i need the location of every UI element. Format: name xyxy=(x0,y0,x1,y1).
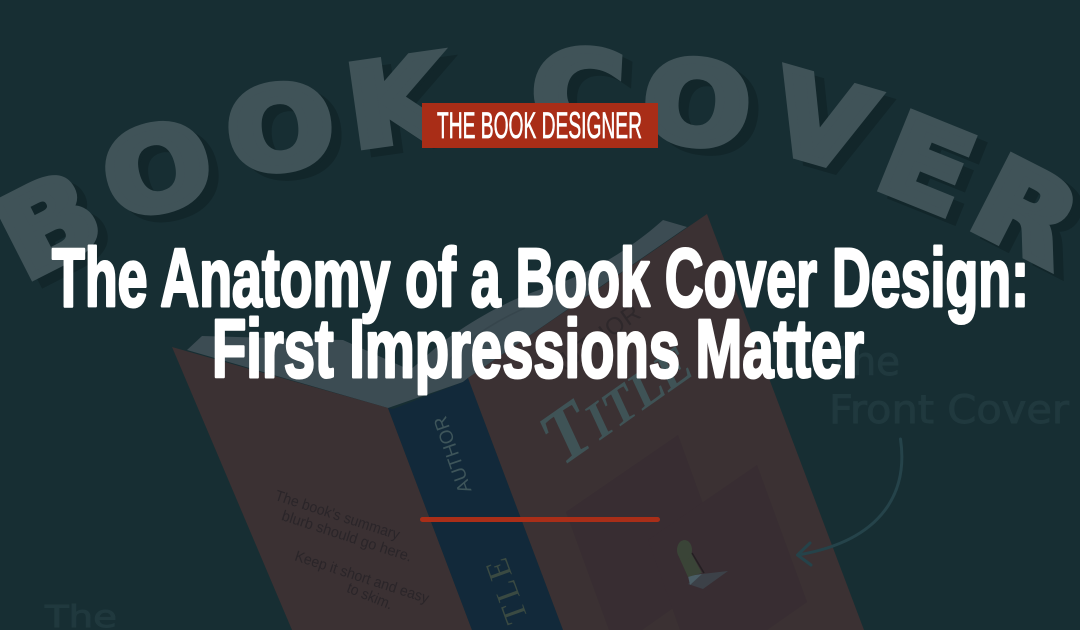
arched heading: BOOK COVER: O xyxy=(90,95,225,247)
arched heading: BOOK COVER: V xyxy=(767,54,896,206)
keyhole xyxy=(677,540,728,589)
book illustration xyxy=(172,214,864,630)
front cover inner panel xyxy=(566,435,727,630)
front cover xyxy=(468,214,864,630)
arched heading: BOOK COVER: C xyxy=(538,34,637,169)
arched heading: BOOK COVER: O xyxy=(100,102,235,254)
spine title: TLE xyxy=(478,551,536,628)
book pages xyxy=(187,220,687,408)
arched heading: BOOK COVER: O xyxy=(231,67,350,208)
arrow to front cover xyxy=(798,439,902,565)
arched heading: BOOK COVER: O xyxy=(647,42,766,183)
blurb text on back cover: blurb should go here. xyxy=(280,507,414,566)
label: The Front Cover: Front Cover xyxy=(829,388,1070,433)
spine xyxy=(388,378,563,630)
arched heading: BOOK COVER xyxy=(0,27,1080,313)
front cover author: AUTHOR xyxy=(543,299,646,382)
blurb text on back cover: The book's summary xyxy=(273,487,402,544)
spine author: AUTHOR xyxy=(430,413,476,496)
arched heading: BOOK COVER: C xyxy=(528,27,627,162)
front cover title: TITLE xyxy=(524,318,707,481)
blurb text on back cover: to skim. xyxy=(344,580,395,613)
arched heading: BOOK COVER: E xyxy=(872,97,1000,249)
arched heading: BOOK COVER: E xyxy=(862,90,990,242)
blurb text on back cover xyxy=(273,487,431,613)
blurb text on back cover: Keep it short and easy xyxy=(293,548,431,607)
label: The Front Cover: The xyxy=(827,340,900,385)
title xyxy=(52,231,1029,395)
arched heading: BOOK COVER: O xyxy=(637,35,756,176)
arched heading: BOOK COVER: O xyxy=(221,60,340,201)
back cover xyxy=(172,347,472,630)
logo badge: THE BOOK DESIGNER xyxy=(437,105,642,146)
arched heading: BOOK COVER: V xyxy=(757,47,886,199)
logo badge xyxy=(422,103,658,148)
arched heading: BOOK COVER: K xyxy=(349,39,468,181)
label: The Front Cover xyxy=(827,340,1070,433)
front cover second inner panel xyxy=(648,465,807,630)
arched heading: BOOK COVER: K xyxy=(339,32,458,174)
red divider xyxy=(420,517,660,522)
